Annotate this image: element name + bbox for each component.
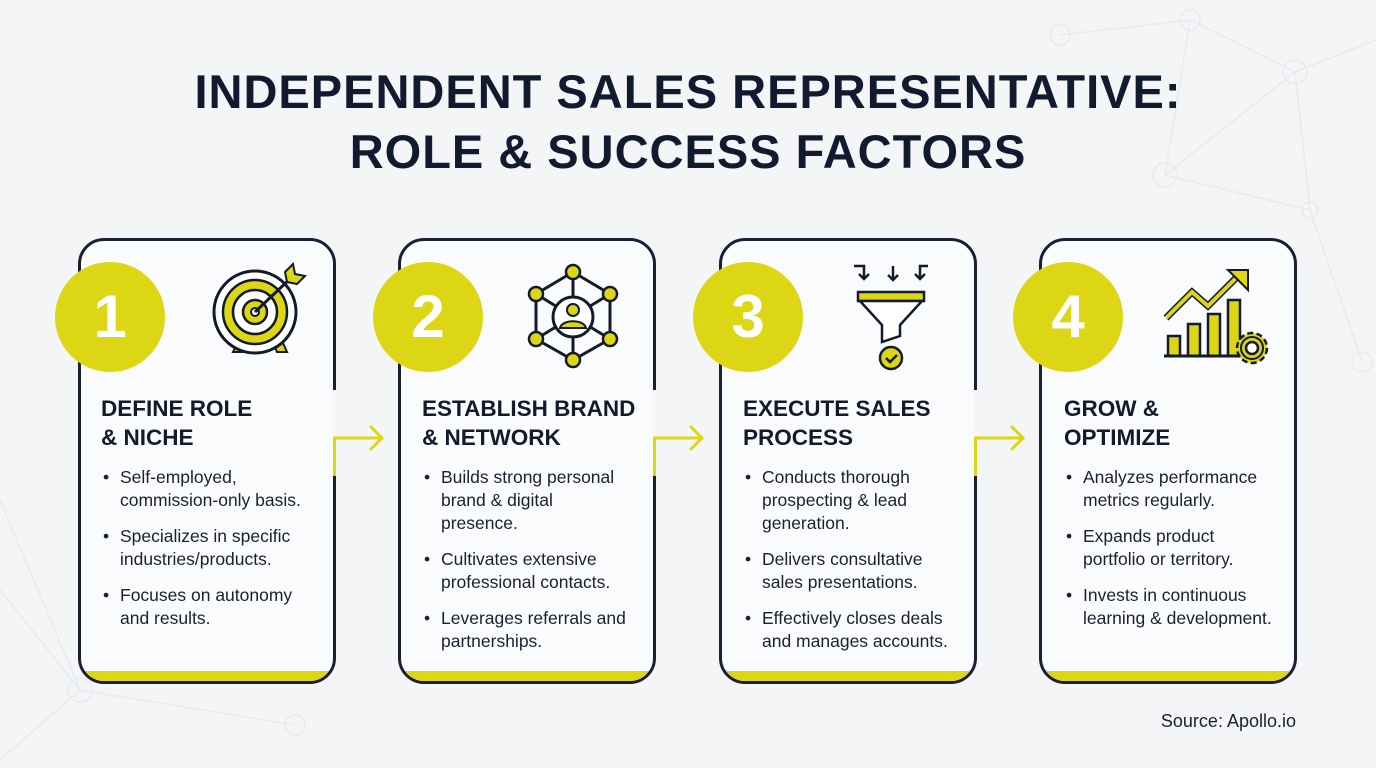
bullets card 1 [104, 467, 301, 628]
heading card 1 [101, 396, 252, 450]
heading card 2 [422, 396, 635, 450]
number badge 4 [1013, 262, 1123, 372]
icon: target [212, 262, 307, 354]
panel: card 2 [398, 238, 656, 684]
bullets card 1: commission-only basis. [120, 490, 301, 510]
bullets card 4: Analyzes performance [1083, 467, 1257, 487]
number badge 1 [55, 262, 165, 372]
bullets card 4 [1066, 467, 1272, 628]
icon: network [528, 264, 618, 368]
panel: card 3 [719, 238, 977, 684]
bullets card 1: Self-employed, [120, 467, 237, 487]
heading card 4: OPTIMIZE [1064, 425, 1170, 450]
source note: Source: Apollo.io [1161, 711, 1296, 731]
heading card 3 [743, 396, 931, 450]
title [194, 65, 1182, 178]
title: ROLE & SUCCESS FACTORS [350, 125, 1026, 178]
bullets card 4: portfolio or territory. [1083, 549, 1233, 569]
number badge 3: 3 [731, 283, 765, 350]
heading card 2: & NETWORK [422, 425, 561, 450]
bullets card 2: professional contacts. [441, 572, 610, 592]
bullets card 3: Conducts thorough [762, 467, 910, 487]
heading card 1: DEFINE ROLE [101, 396, 252, 421]
number badge 2: 2 [411, 283, 445, 350]
bullets card 3: Effectively closes deals [762, 608, 943, 628]
bullets card 3 [746, 467, 948, 651]
number badge 1: 1 [93, 283, 127, 350]
number badge 4: 4 [1051, 283, 1085, 350]
heading card 1: & NICHE [101, 425, 194, 450]
number badge 3 [693, 262, 803, 372]
bullets card 2: Leverages referrals and [441, 608, 626, 628]
title: INDEPENDENT SALES REPRESENTATIVE: [194, 65, 1182, 118]
icon: funnel [854, 264, 928, 370]
bullets card 4: Invests in continuous [1083, 585, 1246, 605]
panel: card 4 [1039, 238, 1297, 684]
bullets card 3: Delivers consultative [762, 549, 922, 569]
bullets card 2: Cultivates extensive [441, 549, 597, 569]
bullets card 2: Builds strong personal [441, 467, 614, 487]
number badge 2 [373, 262, 483, 372]
heading card 4: GROW & [1064, 396, 1159, 421]
bullets card 1: Specializes in specific [120, 526, 290, 546]
bullets card 2: presence. [441, 513, 518, 533]
panel: card 1 [78, 238, 336, 684]
bullets card 3: prospecting & lead [762, 490, 907, 510]
bullets card 1: and results. [120, 608, 210, 628]
bullets card 4: learning & development. [1083, 608, 1272, 628]
bullets card 4: Expands product [1083, 526, 1214, 546]
bullets card 2: partnerships. [441, 631, 542, 651]
bullets card 3: generation. [762, 513, 850, 533]
bullets card 1: Focuses on autonomy [120, 585, 292, 605]
icon: growth chart with gear [1164, 269, 1268, 364]
bullets card 3: sales presentations. [762, 572, 918, 592]
bullets card 4: metrics regularly. [1083, 490, 1215, 510]
heading card 4 [1064, 396, 1170, 450]
bullets card 3: and manages accounts. [762, 631, 948, 651]
heading card 3: EXECUTE SALES [743, 396, 931, 421]
bullets card 2: brand & digital [441, 490, 553, 510]
heading card 2: ESTABLISH BRAND [422, 396, 635, 421]
bullets card 2 [424, 467, 626, 651]
heading card 3: PROCESS [743, 425, 853, 450]
bullets card 1: industries/products. [120, 549, 272, 569]
